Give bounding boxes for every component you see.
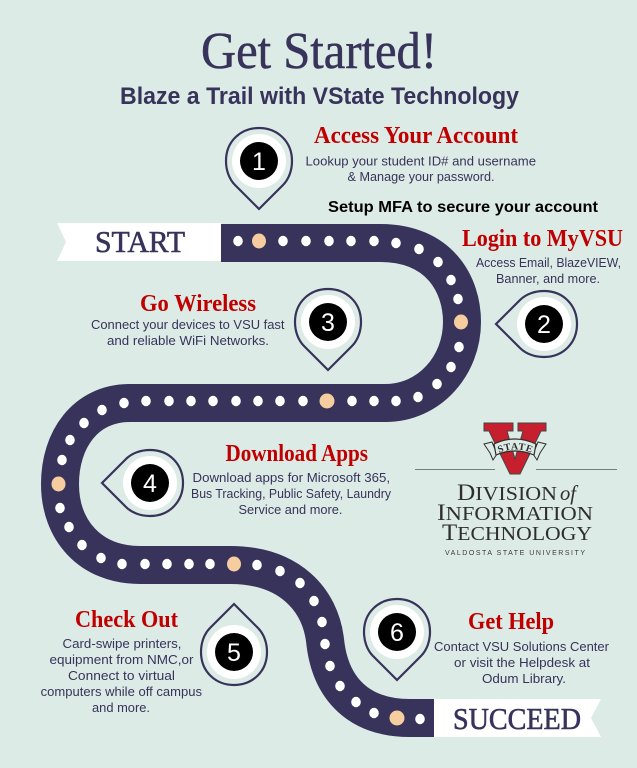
MFA callout: Setup MFA to secure your account bbox=[328, 199, 599, 216]
step 6 text: Odum Library. bbox=[482, 671, 566, 686]
step 6 text: Contact VSU Solutions Center bbox=[434, 639, 610, 654]
winding road with dots bbox=[52, 234, 468, 726]
pin 4 bbox=[102, 450, 183, 516]
step 4 text: Service and more. bbox=[238, 502, 342, 517]
icon: V State shield bbox=[483, 422, 547, 474]
step 6 text: or visit the Helpdesk at bbox=[454, 655, 590, 670]
pin 1: 1 bbox=[252, 148, 266, 176]
pin 6: 6 bbox=[390, 619, 404, 647]
pin 4: 4 bbox=[143, 470, 157, 498]
step 5 text: Card-swipe printers, bbox=[62, 636, 182, 651]
logo: Division of Information Technology: TECHNOLOGY bbox=[442, 520, 592, 545]
pin 3: 3 bbox=[321, 309, 335, 337]
step 6 text bbox=[434, 609, 610, 686]
step 2 text bbox=[462, 226, 623, 286]
title: Get Started! bbox=[201, 23, 437, 80]
step 4 text bbox=[191, 441, 391, 517]
step 3 text: Connect your devices to VSU fast bbox=[91, 317, 285, 332]
logo: Division of Information Technology: VALDOSTA STATE UNIVERSITY bbox=[445, 550, 585, 557]
subtitle: Blaze a Trail with VState Technology bbox=[120, 83, 520, 110]
step 5 text: computers while off campus bbox=[41, 684, 202, 699]
icon: V State shield: STATE bbox=[498, 443, 533, 452]
step 2 text: Access Email, BlazeVIEW, bbox=[476, 255, 621, 270]
pin 3 bbox=[295, 289, 361, 370]
step 4 text: Download apps for Microsoft 365, bbox=[192, 470, 390, 485]
step 3 text: and reliable WiFi Networks. bbox=[107, 333, 269, 348]
logo: Division of Information Technology bbox=[415, 422, 617, 557]
pin 2: 2 bbox=[537, 311, 551, 339]
START banner bbox=[57, 223, 221, 261]
step 5 text: Check Out bbox=[75, 607, 178, 633]
step 3 text bbox=[91, 291, 285, 348]
step 1 text: Access Your Account bbox=[314, 123, 518, 149]
pin 5: 5 bbox=[227, 639, 241, 667]
logo: Division of Information Technology: of bbox=[560, 481, 579, 505]
step 6 text: Get Help bbox=[468, 609, 554, 635]
step 2 text: Login to MyVSU bbox=[462, 226, 623, 252]
step 5 text: equipment from NMC,or bbox=[50, 652, 194, 667]
step 1 text: & Manage your password. bbox=[348, 169, 494, 184]
step 4 text: Download Apps bbox=[226, 441, 368, 467]
step 2 text: Banner, and more. bbox=[496, 271, 600, 286]
step 4 text: Bus Tracking, Public Safety, Laundry bbox=[191, 486, 391, 501]
logo: Division of Information Technology: INFORMATION bbox=[437, 500, 593, 525]
step 5 text bbox=[41, 607, 202, 715]
step 1 text: Lookup your student ID# and username bbox=[306, 154, 536, 168]
pin 2 bbox=[496, 291, 577, 357]
step 1 text bbox=[306, 123, 536, 184]
step 3 text: Go Wireless bbox=[140, 291, 256, 317]
step 5 text: Connect to virtual bbox=[68, 668, 175, 683]
step 5 text: and more. bbox=[92, 700, 150, 715]
pin 5 bbox=[201, 604, 267, 685]
SUCCEED banner: SUCCEED bbox=[453, 701, 581, 736]
pin 1 bbox=[226, 128, 292, 209]
pin 6 bbox=[364, 599, 430, 680]
START banner: START bbox=[95, 224, 185, 259]
logo: Division of Information Technology: DIVISION bbox=[457, 480, 557, 505]
